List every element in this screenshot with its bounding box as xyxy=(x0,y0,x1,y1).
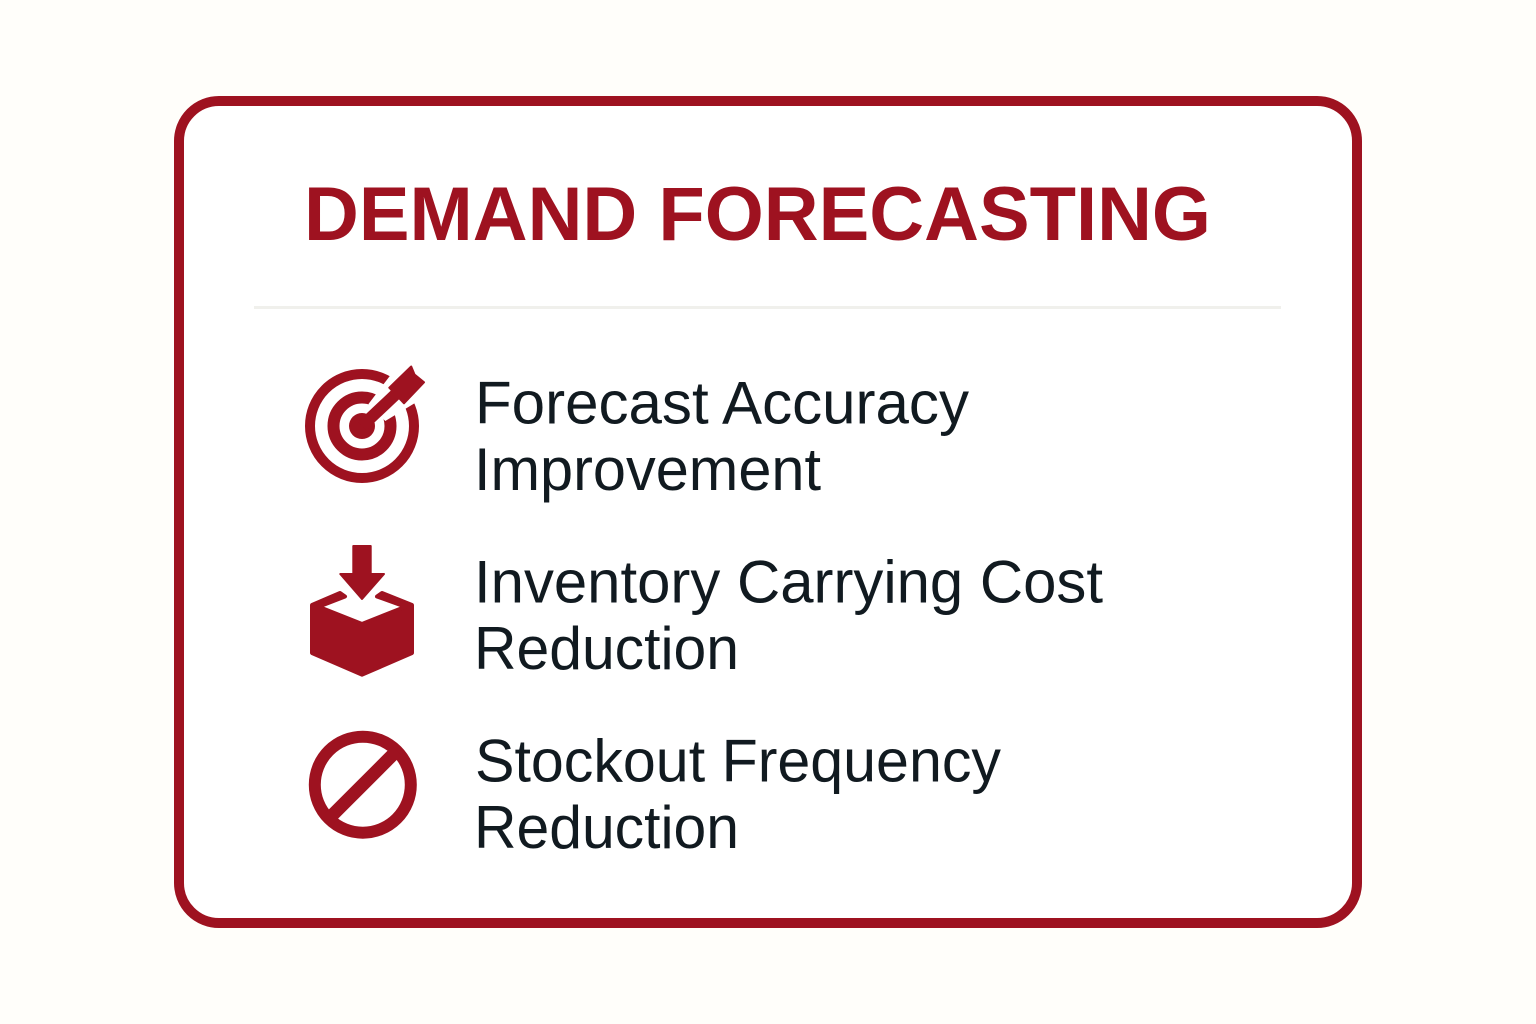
icon: prohibition sign xyxy=(315,737,411,833)
text: forecast accuracy improvement xyxy=(474,370,969,503)
panel: demand forecasting card xyxy=(179,101,1357,923)
title: DEMAND FORECASTING xyxy=(304,172,1211,257)
icon: box with down arrow xyxy=(312,546,412,675)
text: inventory carrying cost reduction: Inventory Carrying Cost xyxy=(474,548,1103,616)
text: stockout frequency reduction: Reduction xyxy=(474,794,739,861)
icon: target with arrow xyxy=(310,366,425,478)
text: inventory carrying cost reduction: Reduction xyxy=(474,615,739,682)
text: forecast accuracy improvement: Forecast Accuracy xyxy=(475,370,969,436)
text: stockout frequency reduction xyxy=(474,728,1001,861)
text: forecast accuracy improvement: Improvement xyxy=(474,436,821,503)
text: stockout frequency reduction: Stockout Frequency xyxy=(475,728,1001,794)
text: inventory carrying cost reduction xyxy=(474,548,1103,682)
